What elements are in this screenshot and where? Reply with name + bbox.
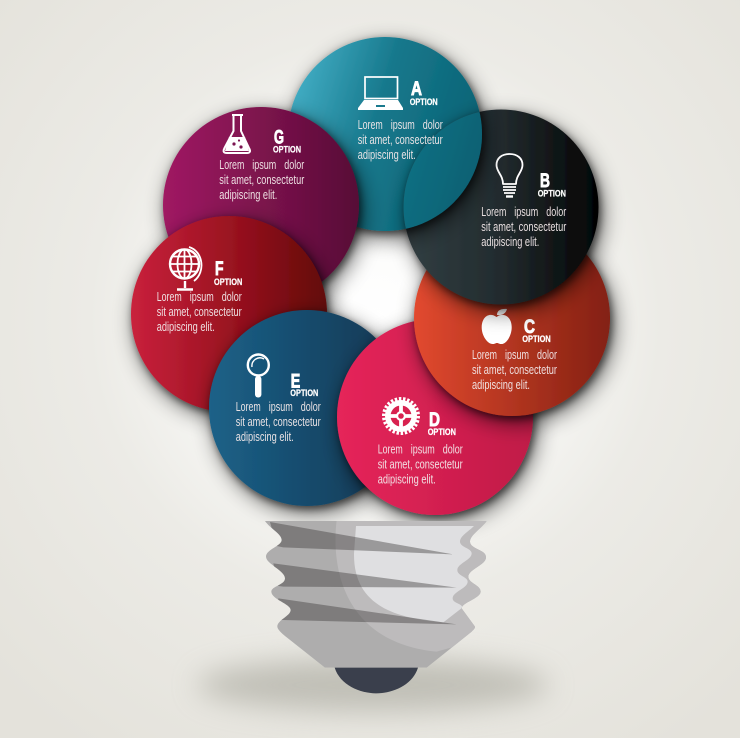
text: E body: dolor [301, 399, 321, 414]
text: G body: sit amet, consectetur [219, 172, 305, 187]
heading: D option: D [429, 409, 440, 431]
heading: E option [290, 370, 318, 399]
text: C body: sit amet, consectetur [472, 362, 557, 377]
panel: option F [131, 216, 327, 412]
icon: apple [482, 309, 512, 344]
text: B body: sit amet, consectetur [481, 219, 567, 234]
text: G body: dolor [284, 157, 305, 172]
heading: B option: B [540, 170, 550, 192]
heading: C option [522, 316, 551, 345]
heading: C option: C [524, 316, 535, 338]
text: C body: adipiscing elit. [472, 377, 530, 392]
text: E body: sit amet, consectetur [236, 414, 321, 429]
text: E body: Lorem [236, 399, 261, 414]
socket contact tip [335, 668, 418, 693]
text: G body: adipiscing elit. [219, 187, 277, 202]
bulb floor shadow [197, 658, 549, 712]
heading: A option: A [411, 78, 422, 100]
icon: gear [384, 399, 418, 433]
heading: A option [410, 78, 438, 108]
text: G body: Lorem [219, 157, 244, 172]
text: D body: dolor [443, 442, 463, 457]
text: F body: dolor [222, 289, 242, 304]
text: E body [236, 399, 321, 444]
panel: option G [163, 107, 359, 303]
heading: C option: OPTION [522, 334, 551, 345]
text: D body: ipsum [411, 442, 435, 457]
text: C body: dolor [537, 347, 557, 362]
text: G body: ipsum [252, 157, 276, 172]
text: D body: adipiscing elit. [378, 472, 436, 487]
text: E body: ipsum [269, 399, 293, 414]
heading: G option [273, 126, 301, 156]
heading: A option: OPTION [410, 97, 438, 108]
socket mid highlight [335, 520, 490, 652]
panel: option C [414, 220, 610, 416]
text: F body: ipsum [190, 289, 214, 304]
text: F body: adipiscing elit. [157, 319, 215, 334]
text: E body: adipiscing elit. [236, 429, 294, 444]
icon: light bulb [496, 154, 522, 196]
text: A body: sit amet, consectetur [358, 132, 443, 147]
text: F body [157, 289, 242, 334]
circle A overlap on top of circle B [404, 110, 501, 243]
text: C body: ipsum [505, 347, 529, 362]
heading: F option [214, 258, 242, 288]
icon: flask [224, 115, 250, 153]
text: B body: adipiscing elit. [481, 234, 539, 249]
heading: E option: E [291, 370, 300, 392]
text: A body: adipiscing elit. [358, 147, 416, 162]
content: option A [358, 77, 443, 162]
text: F body: sit amet, consectetur [157, 304, 242, 319]
text: D body: Lorem [378, 442, 403, 457]
socket bright highlight [354, 526, 474, 622]
panel: option B [404, 110, 598, 304]
text: D body [378, 442, 463, 487]
text: A body: dolor [423, 117, 443, 132]
heading: D option [428, 409, 456, 438]
text: G body [219, 157, 305, 202]
text: B body: Lorem [481, 204, 506, 219]
text: A body: ipsum [391, 117, 415, 132]
heading: G option: OPTION [273, 145, 301, 156]
heading: F option: OPTION [214, 277, 242, 288]
circle: option A [288, 37, 482, 231]
text: F body: Lorem [157, 289, 182, 304]
icon: laptop [358, 77, 403, 110]
heading: D option: OPTION [428, 427, 456, 438]
text: C body [472, 347, 557, 392]
icon: globe [170, 247, 201, 290]
icon: magnifier [248, 354, 269, 398]
heading: F option: F [215, 258, 224, 280]
socket thread wedges [270, 522, 457, 624]
text: B body [481, 204, 567, 249]
heading: G option: G [274, 126, 284, 148]
heading: B option: OPTION [538, 189, 566, 200]
heading: B option [538, 170, 566, 200]
text: B body: ipsum [514, 204, 538, 219]
socket base [260, 518, 493, 672]
heading: E option: OPTION [290, 388, 318, 399]
text: B body: dolor [546, 204, 567, 219]
panel: option D [337, 319, 533, 515]
panel: option E [209, 310, 405, 506]
text: A body [358, 117, 443, 162]
text: C body: Lorem [472, 347, 497, 362]
text: A body: Lorem [358, 117, 383, 132]
bulb socket [260, 518, 493, 693]
text: D body: sit amet, consectetur [378, 457, 463, 472]
